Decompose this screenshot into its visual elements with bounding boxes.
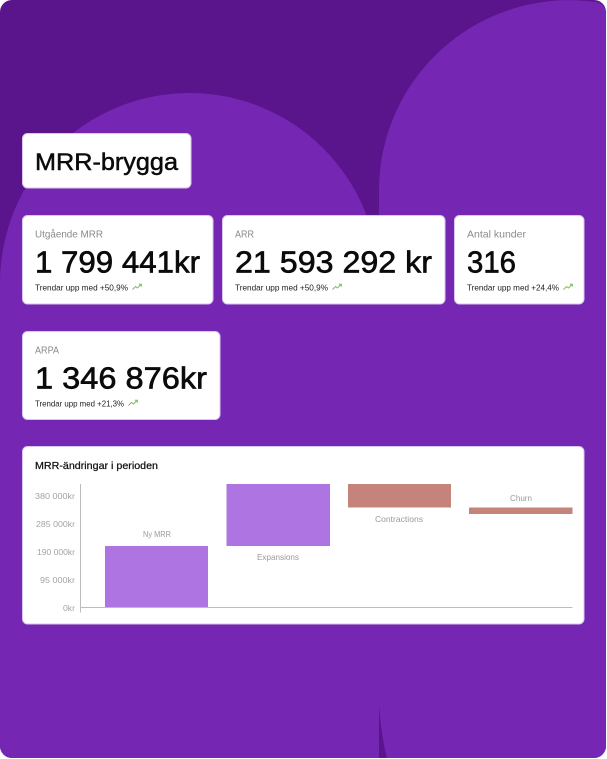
value: 21 593 292 kr — [235, 244, 432, 280]
y axis labels: 380 000kr — [35, 492, 75, 501]
trend text: Trendar upp med +50,9% — [35, 282, 129, 292]
label: Utgående MRR — [35, 228, 103, 240]
y axis labels: 95 000kr — [40, 576, 75, 585]
y axis labels: 190 000kr — [37, 548, 75, 557]
bar: Churn: Churn — [510, 494, 532, 503]
bar: Expansions: Expansions — [257, 553, 299, 562]
bar: Ny MRR: Ny MRR — [143, 530, 171, 539]
label: ARR — [235, 228, 254, 240]
trend text: Trendar upp med +21,3% — [35, 398, 125, 408]
KPI card: ARR — [222, 216, 445, 304]
bar: Contractions — [348, 484, 451, 524]
value: 1 346 876kr — [35, 360, 207, 396]
bar: Ny MRR — [105, 530, 208, 607]
trend text: Trendar upp med +50,9% — [235, 282, 329, 292]
y axis labels: 285 000kr — [36, 520, 75, 529]
y axis labels: 0kr — [63, 604, 75, 613]
chart panel: MRR changes — [22, 446, 584, 624]
trend text: Trendar upp med +24,4% — [467, 282, 560, 292]
bar: Churn — [469, 494, 572, 514]
icon: trend arrow — [128, 400, 137, 406]
icon: trend arrow — [564, 284, 572, 290]
chart title: MRR-ändringar i perioden — [35, 460, 158, 472]
KPI card: ARPA — [22, 332, 220, 420]
KPI card: Utgående MRR — [22, 216, 213, 304]
bar: Expansions — [226, 484, 330, 562]
label: Antal kunder — [467, 228, 526, 240]
y axis labels — [35, 492, 75, 613]
axes — [80, 484, 572, 612]
value: 316 — [467, 244, 516, 280]
value: 1 799 441kr — [35, 244, 200, 280]
bar: Contractions: Contractions — [375, 515, 423, 524]
label: ARPA — [35, 344, 59, 356]
icon: trend arrow — [132, 284, 141, 290]
icon: trend arrow — [332, 284, 341, 290]
title: MRR-brygga — [35, 149, 178, 176]
title card — [22, 134, 191, 188]
KPI card: Antal kunder — [454, 216, 584, 304]
